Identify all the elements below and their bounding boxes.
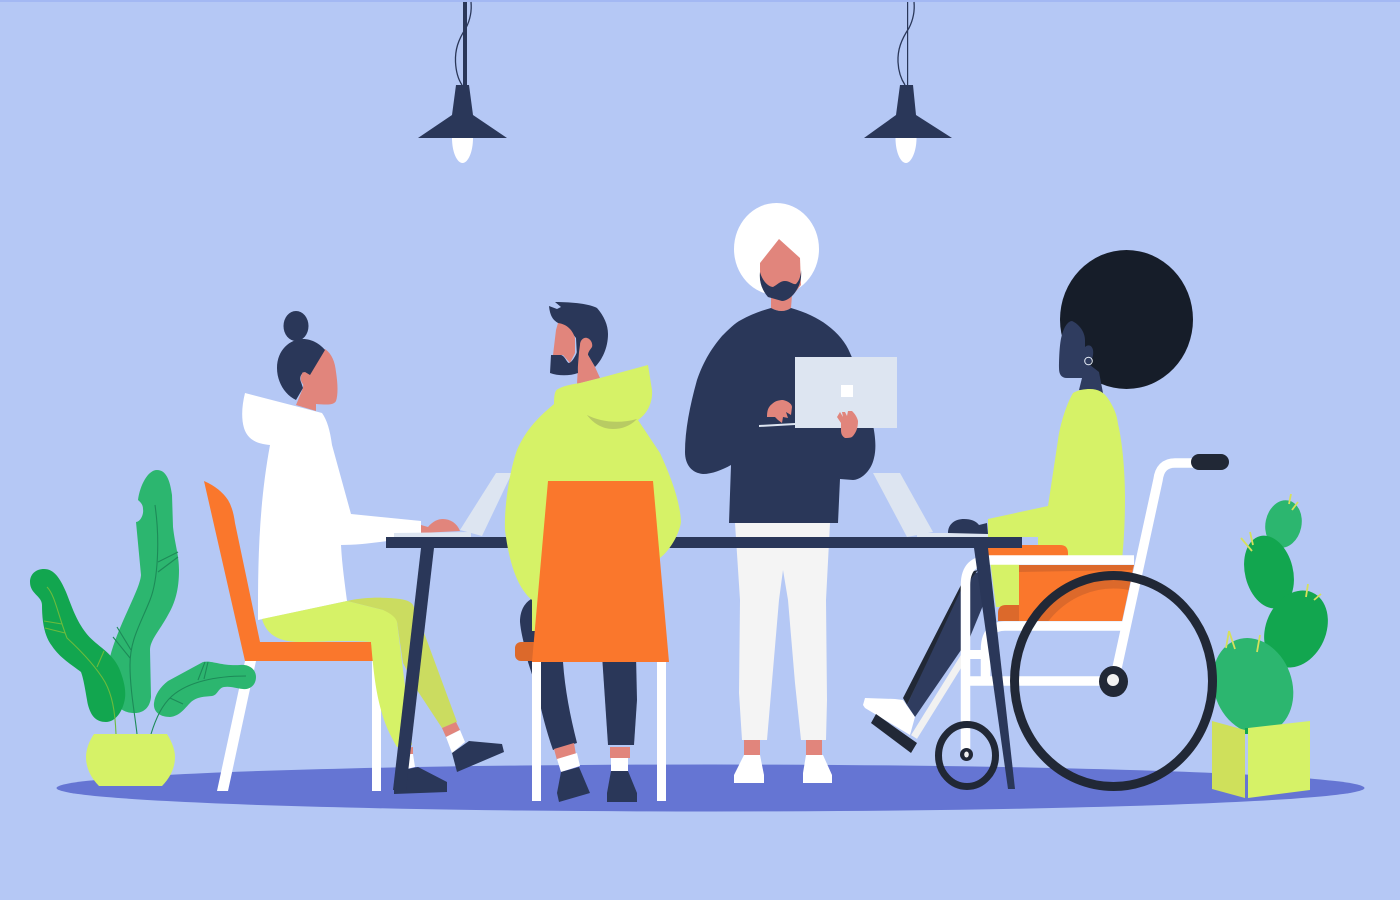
near leg — [262, 601, 412, 747]
torso hoodie — [242, 393, 421, 620]
person: seated woman in white hoodie — [242, 311, 504, 794]
person: bearded man in lime hoodie on orange chair — [505, 302, 681, 802]
right leaf — [154, 662, 256, 717]
push handle — [1117, 463, 1195, 668]
big wheel — [1014, 576, 1212, 786]
laptop: right laptop — [873, 473, 994, 538]
beard — [550, 352, 578, 375]
laptop: left laptop — [394, 473, 512, 538]
person: woman with afro in wheelchair — [863, 250, 1204, 778]
hair — [549, 302, 608, 375]
laptop — [759, 423, 795, 427]
trousers — [735, 523, 830, 740]
far leg — [347, 598, 457, 728]
front leaf — [30, 569, 125, 722]
neck and face — [771, 295, 792, 311]
plant: potted leafy plant — [30, 470, 256, 786]
face — [553, 323, 575, 363]
chair: left orange chair — [204, 481, 381, 791]
beard — [760, 270, 801, 301]
hoodie — [505, 365, 681, 631]
hands — [767, 400, 792, 423]
floor ellipse — [56, 764, 1364, 812]
pot — [86, 734, 175, 786]
icon: left pendant lamp — [418, 2, 507, 163]
turban — [734, 203, 819, 295]
earring — [1085, 357, 1092, 365]
hand — [948, 519, 988, 534]
frame — [966, 560, 1134, 755]
neck and ear — [577, 338, 600, 384]
seat cushion — [988, 545, 1068, 556]
back leaf — [110, 470, 179, 713]
torso — [988, 389, 1125, 560]
legs — [520, 598, 577, 750]
person: standing man with white turban — [685, 203, 897, 783]
wheelchair frame and wheels — [938, 454, 1229, 786]
afro — [1060, 250, 1193, 389]
head — [296, 349, 338, 411]
lime leg — [990, 560, 1019, 607]
sweater — [685, 308, 875, 523]
cactus in box pot — [1200, 494, 1340, 798]
table — [386, 537, 1022, 790]
trouser leg — [907, 572, 984, 717]
footrest strut — [914, 655, 965, 737]
icon: right pendant lamp — [864, 2, 952, 163]
chair — [532, 655, 541, 801]
shoe — [863, 698, 915, 735]
face — [1059, 321, 1103, 393]
small wheel — [938, 724, 996, 786]
